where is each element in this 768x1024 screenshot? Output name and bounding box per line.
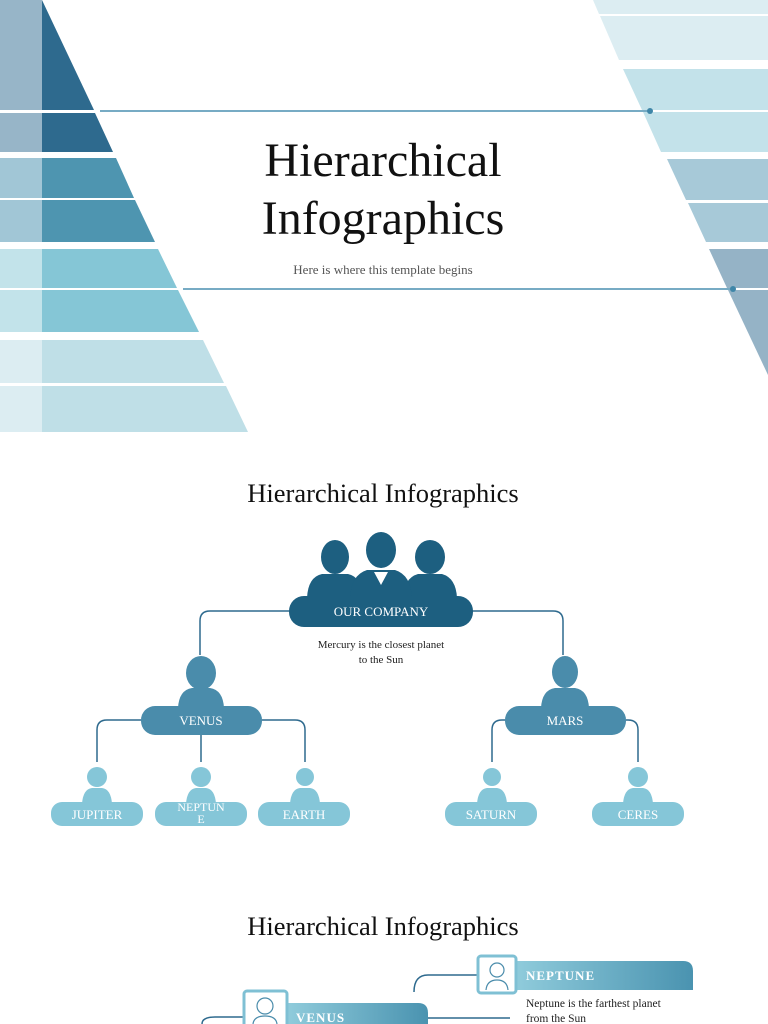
- pill: our company: OUR COMPANY: [334, 604, 429, 619]
- card: neptune: NEPTUNE: [526, 968, 595, 983]
- connector lines: [100, 108, 736, 292]
- icon: mars person: [541, 656, 589, 708]
- org chart: [51, 532, 684, 826]
- text: mercury: to the Sun: [359, 654, 404, 666]
- text: mercury: [318, 639, 444, 666]
- text: mercury: Mercury is the closest planet: [318, 639, 444, 651]
- pill: venus: VENUS: [179, 713, 223, 728]
- org chart: CERES: [618, 807, 658, 822]
- org chart: E: [197, 812, 205, 826]
- connectors bottom: [202, 975, 510, 1024]
- org chart: JUPITER: [72, 807, 123, 822]
- leaf pills: [51, 802, 684, 826]
- left pyramid: [0, 0, 248, 432]
- title: Infographics: [262, 192, 504, 245]
- pill: our company: [289, 596, 473, 627]
- section title 2: Hierarchical Infographics: [247, 478, 519, 508]
- card: neptune: Neptune is the farthest planet: [526, 998, 662, 1010]
- pill: mars: MARS: [547, 713, 583, 728]
- title: Hierarchical: [264, 134, 502, 187]
- title: [262, 134, 504, 245]
- org chart: SATURN: [466, 807, 517, 822]
- pill: mars: [505, 706, 626, 735]
- icon: venus person: [178, 656, 224, 708]
- section title 3: Hierarchical Infographics: [247, 911, 519, 941]
- org chart: EARTH: [283, 807, 325, 822]
- org chart: NEPTUN: [177, 800, 225, 814]
- leaf icons: [82, 767, 653, 804]
- right inverted pyramid: [593, 0, 768, 375]
- card: venus: [244, 991, 428, 1024]
- card: neptune: [478, 956, 693, 1024]
- connectors: [97, 611, 638, 762]
- icon: company people: [307, 532, 457, 598]
- pill: venus: [141, 706, 262, 735]
- subtitle: Here is where this template begins: [293, 262, 473, 277]
